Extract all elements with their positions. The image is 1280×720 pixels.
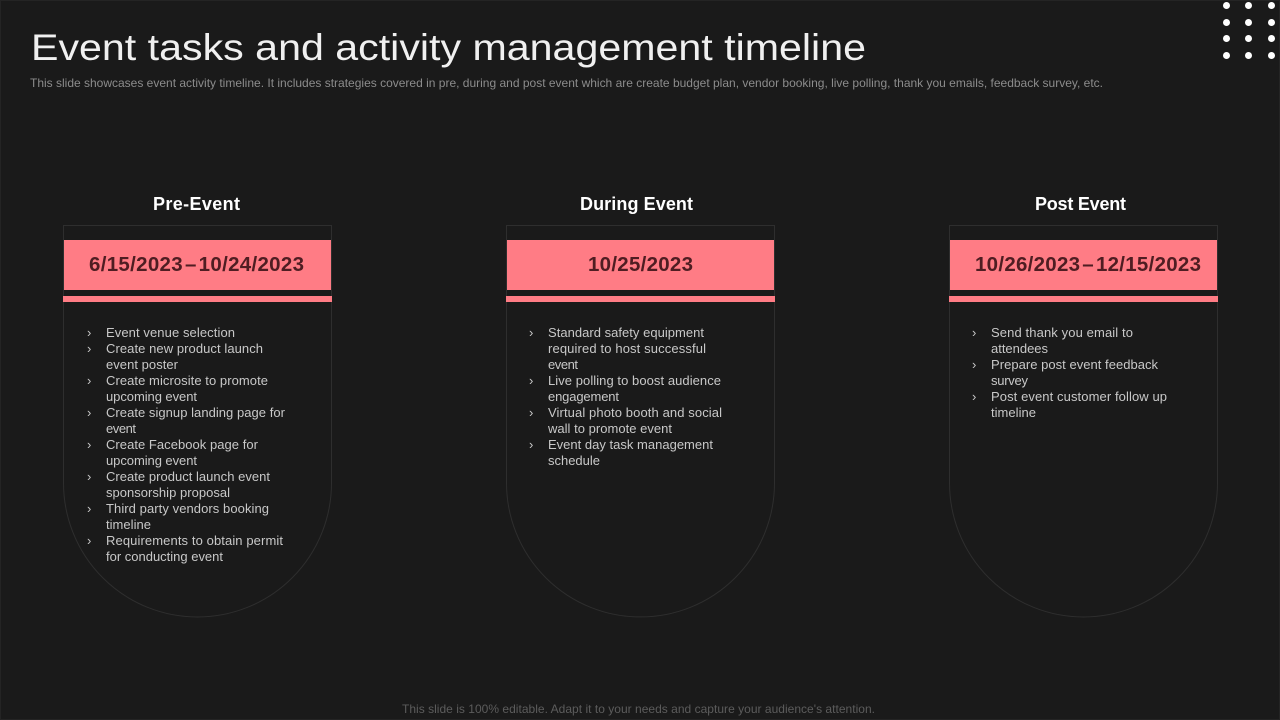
list item — [529, 373, 721, 404]
list item: › — [87, 373, 91, 388]
list item: › — [87, 405, 91, 420]
list item — [972, 389, 1167, 420]
heading: post event: Post Event — [1035, 194, 1126, 214]
list item — [529, 437, 713, 468]
list item — [529, 405, 722, 436]
list item: Virtual photo booth and social — [548, 405, 722, 420]
footer note: This slide is 100% editable. Adapt it to your needs and capture your audience's attention. — [402, 702, 875, 716]
list item: › — [529, 405, 533, 420]
list item: Send thank you email to — [991, 325, 1133, 340]
list item: Create microsite to promote — [106, 373, 268, 388]
list item: › — [87, 437, 91, 452]
list item: event poster — [106, 357, 179, 372]
list item: Standard safety equipment — [548, 325, 704, 340]
heading: during event: During Event — [580, 194, 693, 214]
list item: required to host successful — [548, 341, 706, 356]
list item: schedule — [548, 453, 600, 468]
list item — [87, 437, 259, 468]
list item: › — [529, 437, 533, 452]
list item: › — [87, 501, 91, 516]
list item: › — [972, 389, 976, 404]
title: Event tasks and activity management timeline — [31, 27, 866, 68]
list item: › — [87, 325, 91, 340]
task list: during event — [529, 325, 722, 468]
list item: sponsorship proposal — [106, 485, 230, 500]
accent bar: pre-event — [63, 296, 332, 302]
panel outline: post event — [950, 226, 1218, 617]
heading: pre-event: Pre-Event — [153, 194, 240, 214]
list item: Create Facebook page for — [106, 437, 259, 452]
list item: › — [87, 341, 91, 356]
list item: › — [87, 533, 91, 548]
accent bar: post event — [949, 296, 1218, 302]
list item — [87, 373, 268, 404]
list item: wall to promote event — [547, 421, 672, 436]
list item: › — [529, 373, 533, 388]
task list: post event — [972, 325, 1167, 420]
list item: for conducting event — [106, 549, 223, 564]
icon: decorative dot grid — [1223, 2, 1275, 59]
list item: survey — [991, 373, 1028, 388]
list item: Event day task management — [548, 437, 713, 452]
list item: Create product launch event — [106, 469, 270, 484]
list item: upcoming event — [106, 453, 197, 468]
list item: Create signup landing page for — [106, 405, 286, 420]
list item: › — [972, 357, 976, 372]
date band: post event — [950, 240, 1217, 290]
list item: Live polling to boost audience — [548, 373, 721, 388]
list item: Post event customer follow up — [991, 389, 1167, 404]
panel: post event — [949, 194, 1218, 617]
subtitle: This slide showcases event activity timeline. It includes strategies covered in pre, during and post event which are create budget plan, vendor booking, live polling, thank you emails, feedback survey, etc. — [30, 76, 1103, 90]
list item: Third party vendors booking — [106, 501, 269, 516]
list item: Create new product launch — [106, 341, 263, 356]
date band: during event — [507, 240, 774, 290]
list item: Requirements to obtain permit — [106, 533, 283, 548]
accent bar: during event — [506, 296, 775, 302]
panel outline: pre-event — [64, 226, 332, 617]
list item: upcoming event — [106, 389, 197, 404]
list item: Event venue selection — [106, 325, 235, 340]
date band: post event: 10/26/2023 – 12/15/2023 — [975, 253, 1201, 276]
panel: during event — [506, 194, 775, 617]
date band: pre-event — [64, 240, 331, 290]
list item — [972, 357, 1158, 388]
list item — [972, 325, 1133, 356]
list item — [87, 501, 269, 532]
list item: › — [529, 325, 533, 340]
list item: Prepare post event feedback — [991, 357, 1158, 372]
list item: engagement — [548, 389, 619, 404]
list item — [87, 469, 270, 500]
list item: attendees — [991, 341, 1048, 356]
list item — [87, 533, 283, 564]
list item: › — [87, 469, 91, 484]
date band: pre-event: 6/15/2023 – 10/24/2023 — [89, 253, 304, 276]
panel outline: during event — [506, 226, 774, 617]
list item — [87, 405, 286, 436]
task list: pre-event — [87, 325, 286, 564]
list item — [529, 325, 706, 372]
date band: during event: 10/25/2023 — [588, 253, 693, 276]
list item: event — [548, 357, 578, 372]
list item: timeline — [106, 517, 151, 532]
list item: › — [972, 325, 976, 340]
list item: timeline — [991, 405, 1036, 420]
list item — [87, 341, 263, 372]
list item: event — [106, 421, 136, 436]
panel: pre-event — [63, 194, 332, 617]
